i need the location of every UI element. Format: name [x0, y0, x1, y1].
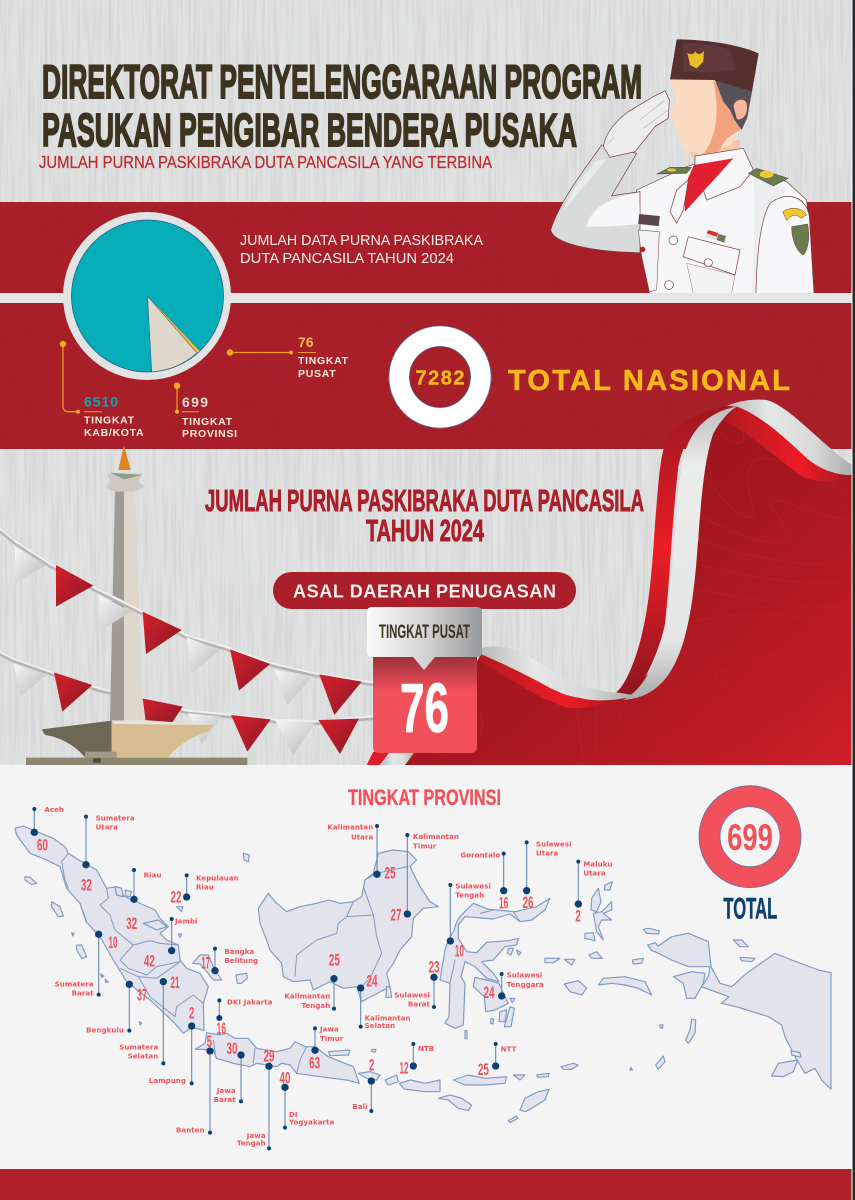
pin: NTB: NTB	[418, 1045, 434, 1053]
monument base	[26, 720, 247, 765]
pin: Sulawesi Barat	[394, 957, 439, 1009]
pin: Banten	[176, 1032, 214, 1135]
white strip behind chart	[0, 293, 852, 303]
chart heading: DUTA PANCASILA TAHUN 2024	[240, 251, 454, 267]
pin: Kalimantan Utara	[327, 824, 395, 882]
badge: total 699: TOTAL	[723, 892, 777, 925]
map of Indonesia	[15, 806, 831, 1150]
pin: Sulawesi Utara: Utara	[536, 850, 559, 858]
pill: asal daerah penugasan: ASAL DAERAH PENUGASAN	[293, 582, 556, 602]
donut: national total	[389, 326, 491, 428]
pin: Jawa Barat: 30	[226, 1039, 237, 1058]
Java	[195, 1033, 359, 1083]
pin: Bangka Belitung: Belitung	[224, 957, 258, 965]
pin: Sumatera Utara: 32	[81, 875, 92, 894]
pin: Kepulauan Riau: 22	[170, 887, 181, 906]
pin: Sumatera Utara: Utara	[96, 823, 118, 831]
pin: Kalimantan Timur: Timur	[413, 842, 437, 850]
pin: NTT	[478, 1042, 517, 1079]
province pins, values and labels: east	[394, 840, 613, 1079]
callout: pusat 76: PUSAT	[298, 368, 336, 380]
Papua	[648, 933, 831, 1089]
card: tingkat pusat: 76	[400, 669, 449, 747]
page edge	[852, 0, 855, 1200]
pin: Kalimantan Selatan: Selatan	[365, 1022, 395, 1030]
Lombok and Sumbawa	[385, 1075, 398, 1085]
pin: DKI Jakarta	[216, 998, 273, 1038]
ribbon tail	[367, 752, 390, 765]
pie slice: provinsi 699	[148, 296, 197, 372]
callout: kab/kota 6510: KAB/KOTA	[84, 427, 144, 439]
callout: pusat 76: 76	[298, 334, 314, 350]
pin: Kalimantan Utara: Utara	[351, 833, 374, 841]
pin: NTT: 25	[478, 1060, 489, 1079]
callout: provinsi 699	[174, 382, 238, 440]
subtitle: JUMLAH PURNA PASKIBRAKA DUTA PANCASILA YANG TERBINA	[39, 152, 492, 172]
pin: Sulawesi Tenggara: Tenggara	[507, 981, 544, 989]
pill: asal daerah penugasan	[273, 572, 576, 609]
callout: provinsi 699: PROVINSI	[182, 428, 238, 440]
callout: provinsi 699: TINGKAT	[182, 416, 233, 428]
pin: Bangka Belitung: 17	[201, 953, 210, 972]
badges	[638, 214, 660, 226]
pin: DI Yogyakarta: Yogyakarta	[288, 1118, 335, 1126]
glove	[603, 91, 669, 157]
pin: Sulawesi Tengah: Tengah	[455, 892, 484, 900]
pin: NTB	[399, 1042, 434, 1078]
pin: Jawa Tengah: Tengah	[237, 1139, 266, 1147]
card: tingkat pusat: TINGKAT PUSAT	[379, 622, 470, 643]
pin: Sumatera Utara: Sumatera	[96, 814, 135, 822]
Bangka Belitung	[193, 955, 222, 980]
pin: Sumatera Barat: Barat	[72, 990, 94, 998]
neck and collar	[683, 140, 740, 163]
cap	[670, 39, 759, 92]
pin: Lampung: Lampung	[149, 1077, 186, 1085]
pin: Jawa Barat	[214, 1039, 245, 1104]
pin: Jawa Timur	[309, 1026, 344, 1073]
pin: Kalimantan Tengah: Tengah	[301, 1002, 330, 1010]
pin: Sumatera Utara	[81, 814, 135, 894]
pin: Jawa Timur: Jawa	[319, 1026, 339, 1034]
pin: DI Yogyakarta: DI	[289, 1111, 298, 1119]
pin: Jambi	[144, 917, 197, 970]
pin: DI Yogyakarta: 40	[279, 1068, 290, 1087]
pin: Aceh: Aceh	[44, 806, 64, 814]
bunting flags	[13, 547, 362, 755]
pin: Kalimantan Tengah: Kalimantan	[284, 993, 330, 1001]
callout: pusat 76: TINGKAT	[298, 355, 349, 367]
pin: Kalimantan Utara: Kalimantan	[327, 824, 373, 832]
pin: Kepulauan Riau: Kepulauan	[196, 874, 239, 882]
pin: Kalimantan Selatan	[357, 971, 411, 1030]
pin: Sulawesi Tengah: Sulawesi	[455, 883, 491, 891]
pin: Riau: Riau	[144, 872, 162, 880]
chart heading	[240, 233, 483, 267]
badge: total 699: 699	[727, 817, 773, 858]
lower panel background	[0, 765, 852, 1169]
total nasional label: TOTAL NASIONAL	[508, 365, 790, 397]
lower red band	[479, 653, 623, 708]
pin: Bengkulu	[86, 981, 147, 1035]
province pins, values and labels: west: 10	[108, 933, 117, 952]
badge: total 699	[699, 786, 801, 925]
pin: Bali: 2	[369, 1055, 374, 1074]
head and ear	[669, 80, 737, 154]
province pins, values and labels: west	[31, 806, 459, 1150]
pin: Maluku Utara	[575, 860, 613, 926]
title	[42, 55, 642, 156]
pin: Maluku Utara: Utara	[583, 870, 606, 878]
Sumatra small islands	[52, 902, 63, 917]
pin: Sulawesi Barat: Sulawesi	[394, 991, 430, 999]
Sulawesi south-east arm	[473, 977, 508, 1012]
pin: Sulawesi Tengah: 10	[455, 942, 464, 961]
torso	[637, 150, 814, 293]
pin: Kalimantan Timur: Kalimantan	[413, 833, 459, 841]
section heading: TAHUN 2024	[366, 513, 484, 548]
pie chart	[63, 212, 231, 380]
red tie	[684, 158, 733, 212]
pin: Gorontalo	[460, 851, 508, 912]
pin: Bengkulu: Bengkulu	[86, 1027, 124, 1035]
pin: Bengkulu: 37	[137, 985, 147, 1004]
pin: Sumatera Selatan: Sumatera	[119, 1043, 159, 1051]
pin: Jambi: 42	[144, 951, 155, 970]
pin: Lampung: 2	[189, 1003, 194, 1022]
background: red band top	[0, 202, 852, 449]
callout: kab/kota 6510	[60, 341, 144, 439]
top white band crest	[727, 400, 852, 475]
pin: Sumatera Selatan: Selatan	[128, 1053, 158, 1061]
eastern islands	[438, 882, 831, 1123]
Maluku	[585, 882, 612, 941]
pin: Maluku Utara: 2	[575, 907, 581, 926]
western islands	[15, 826, 440, 1092]
pin: Sumatera Selatan	[119, 973, 179, 1065]
province pins, values and labels: west: 21	[170, 973, 179, 992]
section heading	[205, 483, 644, 548]
pin: Banten: Banten	[176, 1127, 205, 1135]
pin: Jawa Tengah: Jawa	[246, 1132, 266, 1140]
pin: Kalimantan Tengah	[284, 951, 340, 1011]
pin: NTB: 12	[399, 1059, 408, 1078]
pin: Sumatera Barat	[55, 931, 117, 998]
lapels	[670, 180, 688, 223]
pockets and buttons	[638, 230, 659, 292]
vertical white band	[623, 407, 737, 700]
pin: DI Yogyakarta	[279, 1068, 335, 1130]
top red band	[723, 407, 852, 481]
pin: Sulawesi Barat: Barat	[408, 1000, 431, 1008]
pin: Jawa Timur: Timur	[320, 1035, 344, 1043]
pin: Sumatera Barat: Sumatera	[55, 980, 94, 988]
card: tingkat pusat	[367, 607, 482, 753]
lower white band	[479, 646, 633, 700]
pin: Bangka Belitung: Bangka	[224, 948, 254, 956]
pin: Bali	[352, 1055, 375, 1113]
pin: Kepulauan Riau	[170, 873, 239, 906]
pin: Kalimantan Tengah: 25	[329, 951, 340, 970]
pie slice: pusat 76	[148, 296, 200, 353]
pin: Sulawesi Tenggara: 24	[483, 983, 495, 1002]
pin: Sulawesi Barat: 23	[428, 957, 439, 976]
Sumatra	[15, 826, 208, 1033]
Sulawesi north arm	[440, 898, 550, 1028]
pin: Sulawesi Tenggara	[483, 971, 544, 1002]
pin: Aceh: 60	[37, 836, 48, 855]
pin: Riau: 32	[126, 914, 137, 933]
pin: Bali: Bali	[352, 1103, 368, 1111]
pin: Jambi: Jambi	[174, 917, 197, 925]
donut: national total: 7282	[416, 368, 464, 390]
pin: Sulawesi Utara: 26	[522, 893, 533, 912]
monument and bunting	[0, 445, 375, 765]
pin: Jawa Barat: Jawa	[216, 1087, 236, 1095]
pin: Sulawesi Utara	[522, 840, 572, 912]
chart heading: JUMLAH DATA PURNA PASKIBRAKA	[240, 233, 483, 249]
contour lines	[437, 430, 852, 765]
pin: Bangka Belitung	[201, 947, 258, 974]
monument shaft	[106, 445, 145, 721]
pin: DKI Jakarta: DKI Jakarta	[227, 998, 273, 1006]
pin: Kalimantan Timur	[390, 833, 459, 924]
pin: Sulawesi Tenggara: Sulawesi	[507, 971, 542, 979]
pin: Gorontalo: 16	[499, 893, 508, 912]
pin: Jawa Barat: Barat	[214, 1096, 236, 1104]
pin: Aceh	[31, 806, 64, 855]
callout: kab/kota 6510: TINGKAT	[84, 414, 135, 426]
front bunting string	[0, 529, 375, 684]
rear bunting string	[0, 652, 375, 723]
pin: Jawa Tengah: 29	[263, 1047, 274, 1066]
pin: Sulawesi Utara: Sulawesi	[536, 840, 572, 848]
Kalimantan	[258, 850, 438, 1002]
pin: NTT: NTT	[501, 1045, 517, 1053]
pin: Gorontalo: Gorontalo	[460, 851, 500, 859]
pin: DKI Jakarta: 16	[217, 1019, 226, 1038]
ribbon and red panel	[367, 400, 852, 765]
callout: provinsi 699: 699	[182, 394, 208, 410]
vertical red band	[616, 406, 733, 695]
pin: Kalimantan Selatan: Kalimantan	[365, 1014, 411, 1022]
Nusa Tenggara	[453, 1075, 507, 1085]
red panel	[403, 407, 852, 765]
pin: Maluku Utara: Maluku	[583, 861, 613, 869]
heading: tingkat provinsi: TINGKAT PROVINSI	[348, 785, 501, 810]
pin: Riau	[126, 868, 162, 933]
pin: Kepulauan Riau: Riau	[196, 884, 214, 892]
pin: Sulawesi Tengah	[447, 883, 491, 961]
callout: kab/kota 6510: 6510	[84, 394, 118, 410]
pin: Kalimantan Selatan: 24	[366, 971, 378, 990]
pin: Kalimantan Timur: 27	[390, 905, 401, 924]
pin: Lampung	[149, 1003, 195, 1085]
callout: pusat 76	[227, 334, 349, 380]
pin: Jawa Timur: 63	[309, 1054, 320, 1073]
pin: Kalimantan Utara: 25	[384, 863, 395, 882]
arm and sleeve	[551, 145, 640, 253]
footer band	[0, 1169, 852, 1200]
pin: Banten: 5	[207, 1032, 212, 1051]
pin: Jawa Tengah	[237, 1047, 274, 1150]
Bali	[358, 1072, 380, 1080]
epaulettes	[657, 167, 692, 174]
illustration: saluting officer	[551, 39, 814, 293]
